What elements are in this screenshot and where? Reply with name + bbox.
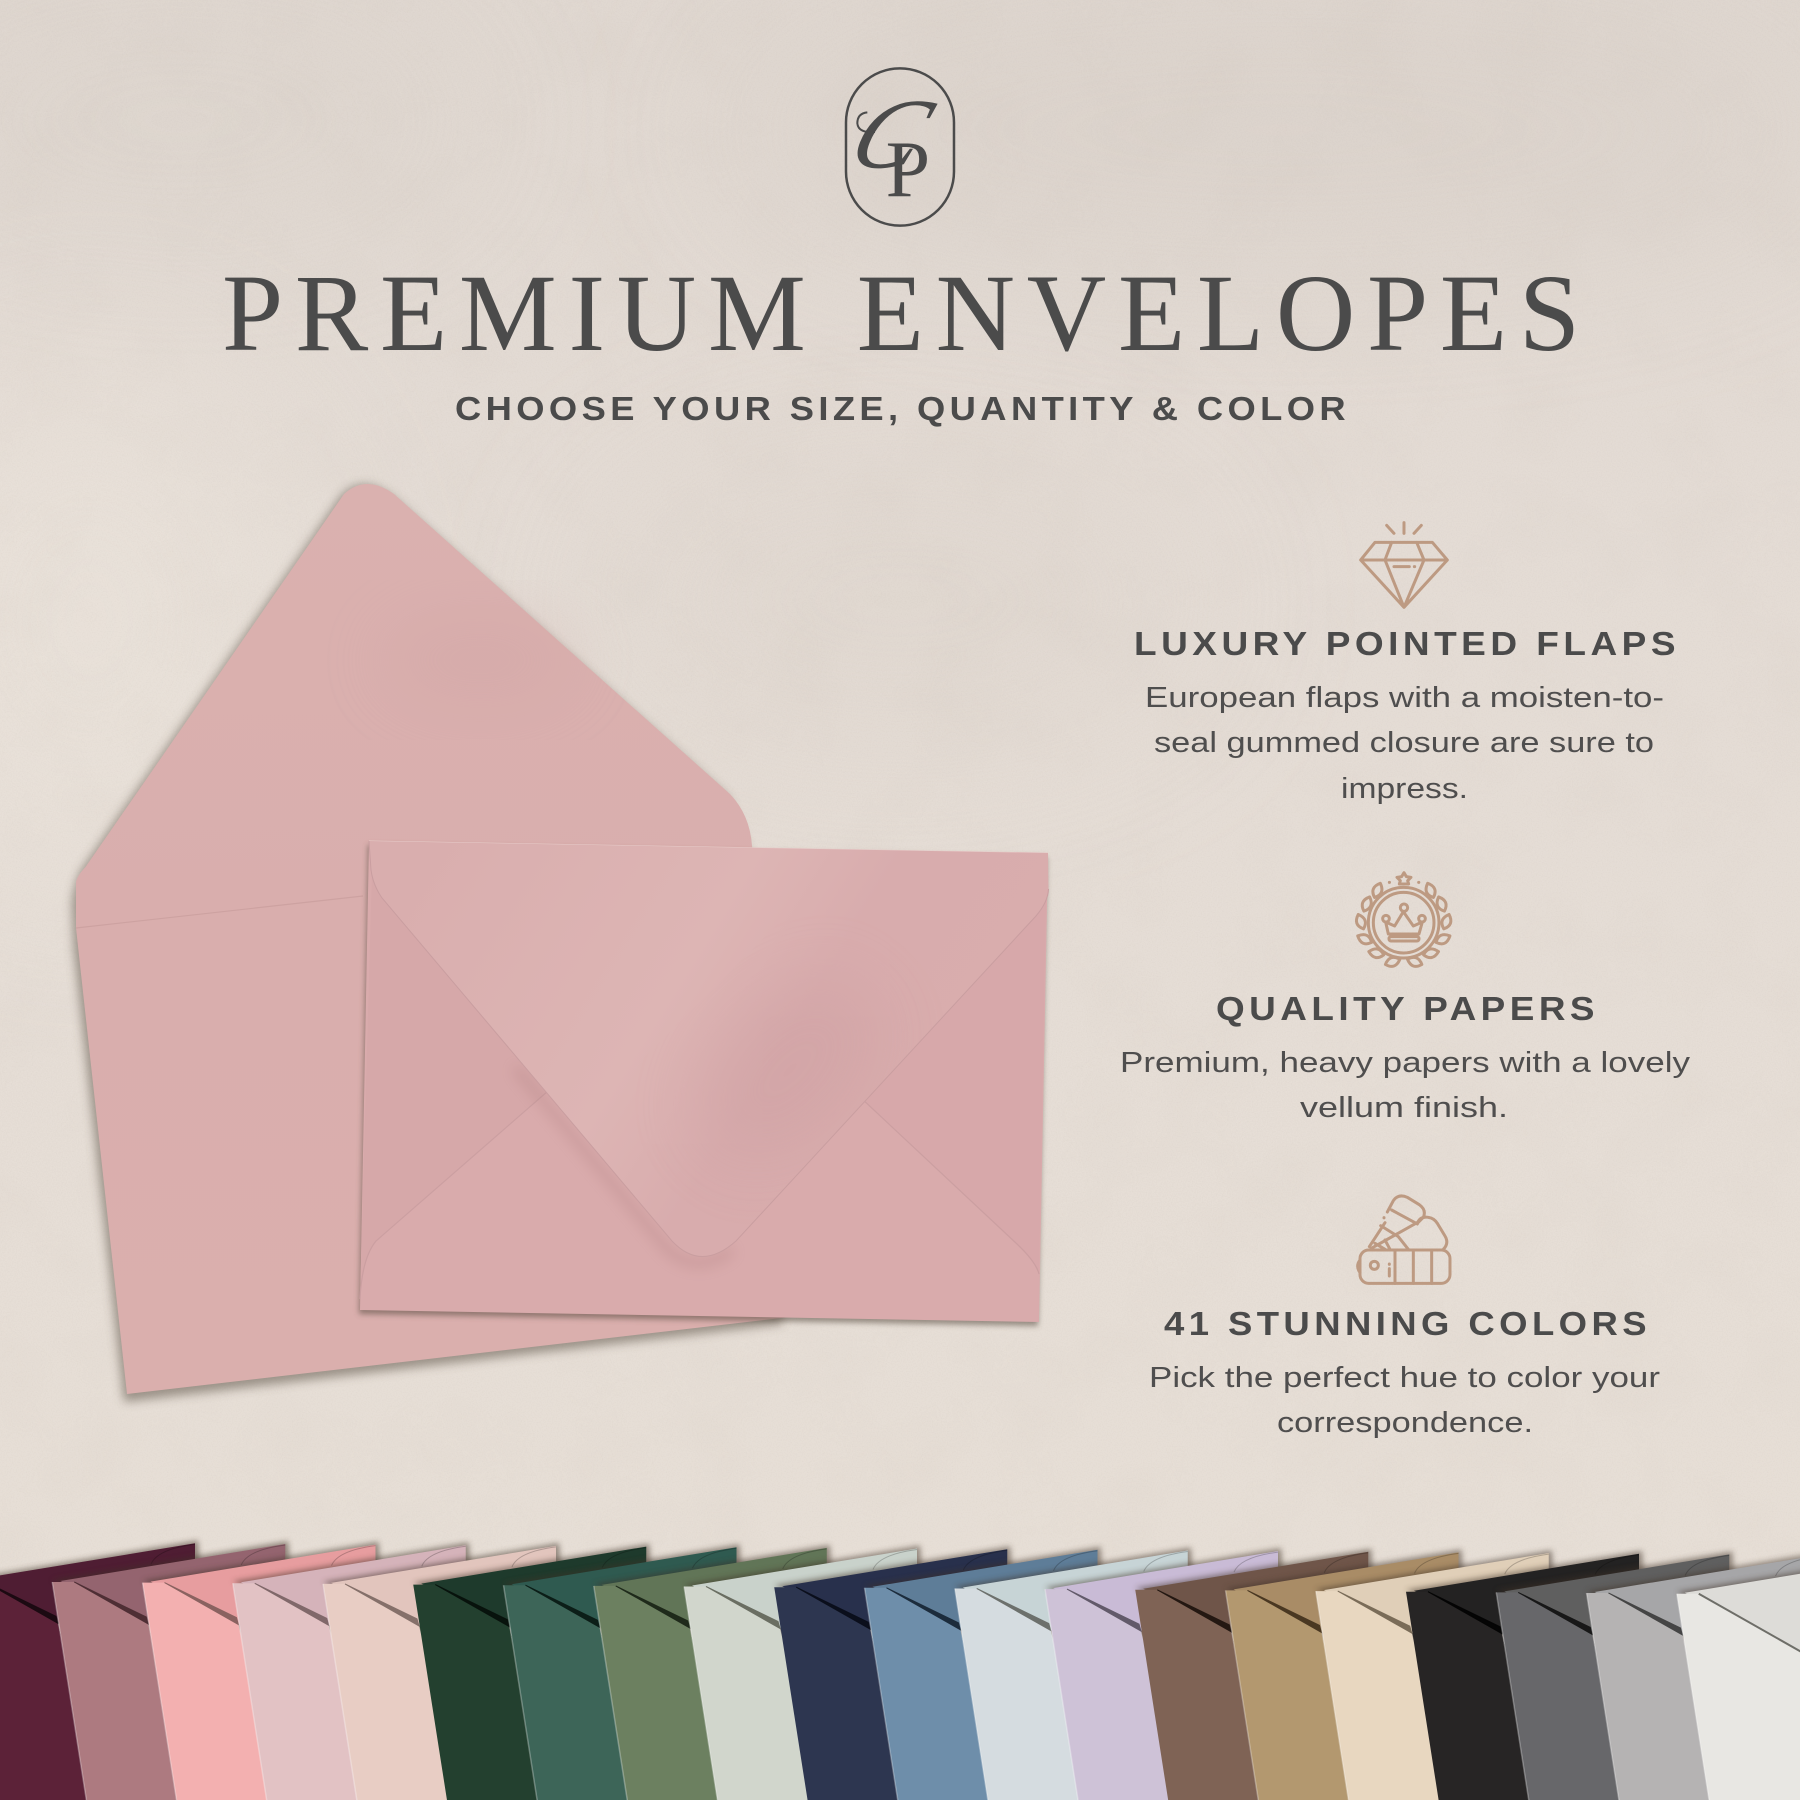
icon: colour fan	[1358, 1196, 1450, 1283]
body text	[1145, 682, 1664, 805]
envelope flap	[369, 841, 1048, 1256]
body text	[1120, 1047, 1691, 1124]
body text: impress.	[1341, 773, 1468, 805]
icon: crown seal	[1354, 873, 1453, 969]
subtitle: CHOOSE YOUR SIZE, QUANTITY & COLOR	[455, 390, 1350, 427]
swatch: pale green	[684, 1546, 922, 1800]
body text	[1149, 1362, 1660, 1439]
logo: CP monogram badge: P	[886, 126, 930, 214]
swatch: light pink	[233, 1542, 471, 1800]
swatch: brown	[1135, 1549, 1373, 1800]
swatch: pink	[142, 1542, 380, 1800]
body text: vellum finish.	[1300, 1092, 1508, 1124]
swatch: grey	[1496, 1551, 1734, 1800]
logo: CP monogram badge	[835, 68, 954, 226]
swatch: dark green	[413, 1544, 651, 1800]
envelope lower folds	[360, 872, 548, 1299]
feature: luxury pointed flaps	[1134, 523, 1680, 805]
heading: 41 STUNNING COLORS	[1164, 1305, 1651, 1342]
swatch: sage	[594, 1545, 832, 1800]
swatch: navy	[774, 1546, 1012, 1800]
swatch: teal	[504, 1544, 742, 1800]
body text: European flaps with a moisten-to-	[1145, 682, 1664, 714]
swatch: light grey	[1586, 1552, 1800, 1800]
swatch: tan	[1226, 1549, 1464, 1800]
icon: diamond	[1361, 523, 1447, 607]
heading: LUXURY POINTED FLAPS	[1134, 625, 1680, 662]
feature: quality papers	[1120, 873, 1691, 1124]
feature: 41 stunning colors	[1149, 1196, 1660, 1439]
title: PREMIUM ENVELOPES	[222, 252, 1580, 374]
swatch: black	[1406, 1551, 1644, 1800]
swatch: cream	[1316, 1550, 1554, 1800]
heading: QUALITY PAPERS	[1216, 990, 1599, 1027]
swatch: blush	[323, 1543, 561, 1800]
swatch: burgundy	[0, 1540, 200, 1800]
swatch: mauve	[52, 1541, 290, 1800]
swatch: white	[1677, 1553, 1800, 1800]
open envelope flap fold line	[76, 896, 363, 928]
colour swatch envelopes row	[0, 1540, 1800, 1800]
closed envelope, front	[359, 841, 1048, 1326]
body text: Pick the perfect hue to color your	[1149, 1362, 1660, 1394]
body text: seal gummed closure are sure to	[1154, 727, 1654, 759]
swatch: slate blue	[864, 1547, 1102, 1800]
body text: Premium, heavy papers with a lovely	[1120, 1047, 1691, 1079]
swatch: pale blue	[955, 1548, 1193, 1800]
body text: correspondence.	[1277, 1407, 1533, 1439]
logo: CP monogram badge: C	[835, 79, 948, 189]
open envelope, back	[72, 484, 790, 1402]
swatch: lilac	[1045, 1548, 1283, 1800]
